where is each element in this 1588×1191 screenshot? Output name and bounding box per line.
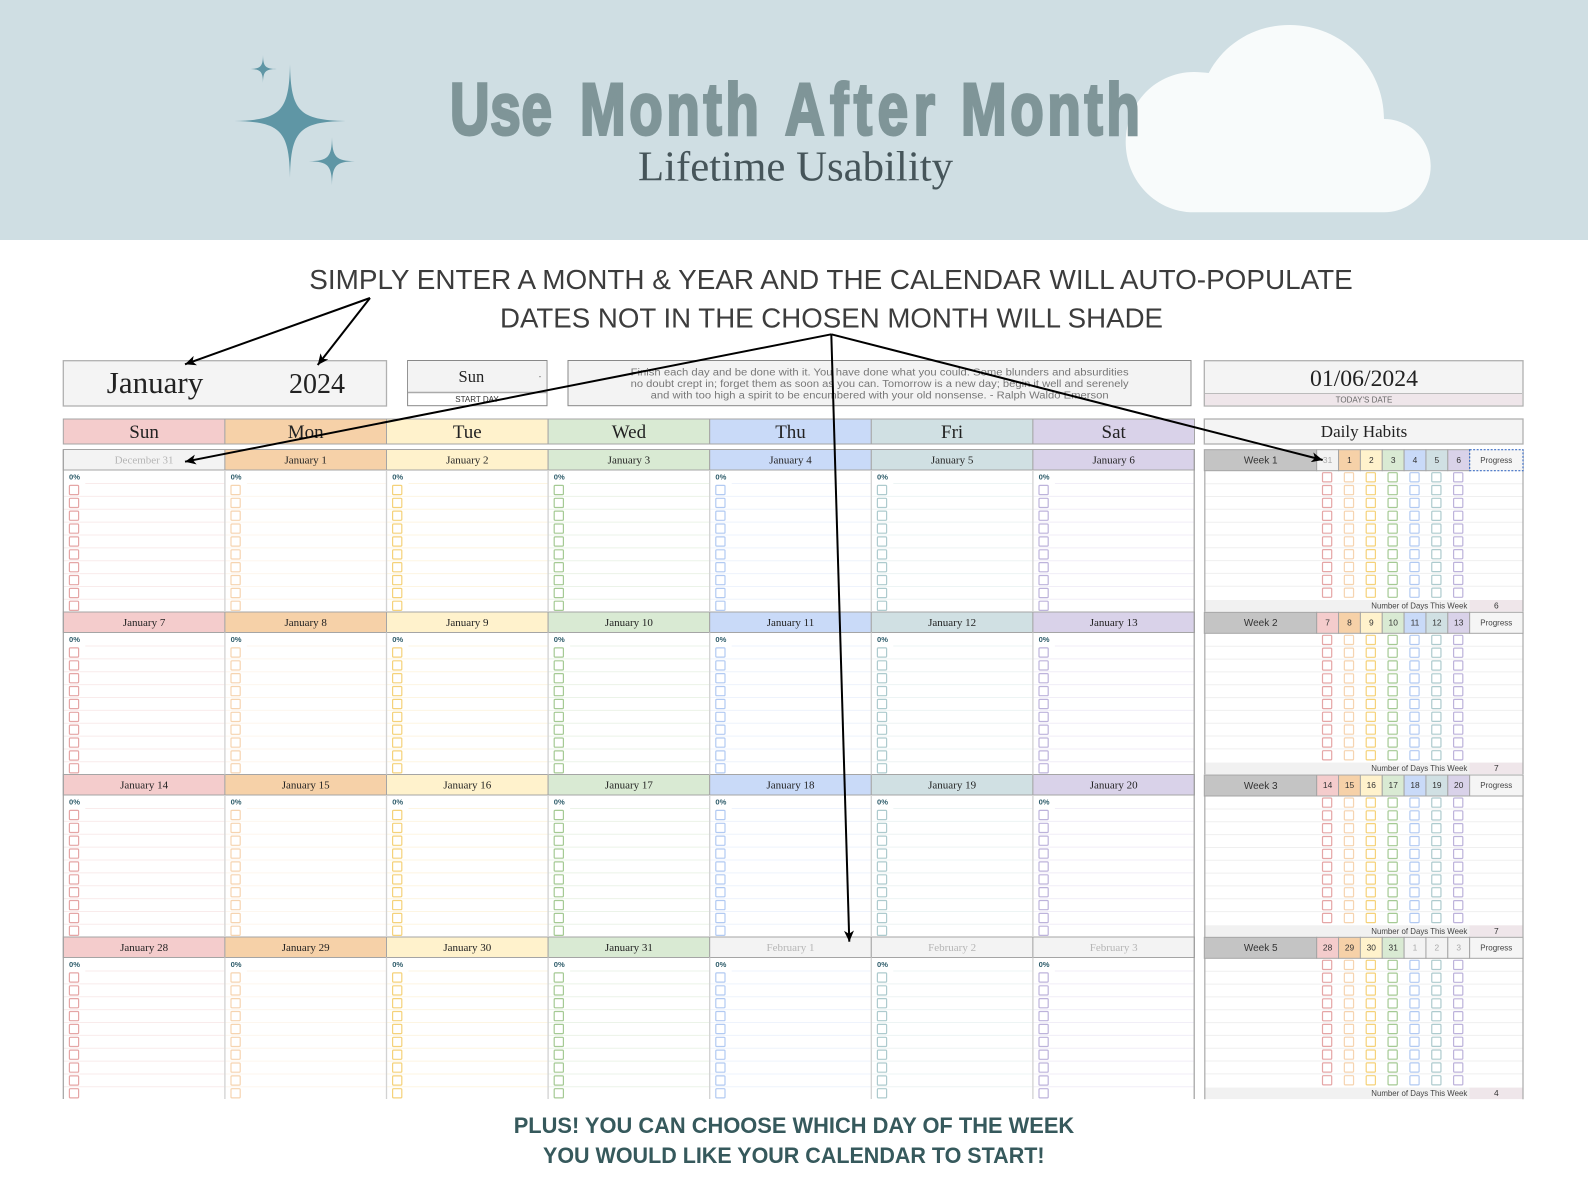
panel: habits week 1: 4 — [1413, 455, 1418, 465]
day: January 13 — [1033, 612, 1194, 773]
panel: today's date: TODAY'S DATE — [1336, 396, 1392, 405]
panel: habits week 2: 10 — [1389, 617, 1398, 627]
day: January 4: January 4 — [769, 454, 812, 466]
panel: quote — [568, 360, 1191, 406]
day: January 30: 0% — [392, 960, 403, 969]
panel: habits week 3 — [1204, 775, 1523, 937]
day: December 31: December 31 — [115, 454, 174, 466]
day: January 16: January 16 — [443, 780, 492, 792]
panel: habits week 3: 16 — [1367, 780, 1376, 790]
panel: start day selector: START DAY — [455, 395, 499, 404]
panel: habits week 3: 14 — [1323, 780, 1333, 790]
panel: start day selector: - — [539, 372, 542, 381]
panel: habits week 1 — [1204, 450, 1523, 612]
subtitle: Lifetime Usability — [638, 145, 953, 191]
day: January 14: 0% — [69, 798, 80, 807]
day: January 5: 0% — [877, 473, 888, 482]
day: January 31: 0% — [554, 960, 565, 969]
panel: habits week 5: 29 — [1345, 942, 1354, 952]
title: After — [785, 69, 941, 150]
panel: quote: and with too high a spirit to be encumbered with your old nonsense. - Ralph Waldo Emerson — [651, 390, 1109, 402]
instruction text: DATES NOT IN THE CHOSEN MONTH WILL SHADE — [500, 302, 1163, 333]
day: January 1 — [225, 450, 386, 610]
panel: habits week 5: 4 — [1494, 1088, 1499, 1098]
day: January 13: January 13 — [1090, 617, 1138, 629]
panel: today's date: 01/06/2024 — [1310, 366, 1418, 392]
panel: habits week 3: Week 3 — [1244, 781, 1278, 792]
callout: start day note: PLUS! YOU CAN CHOOSE WHICH DAY OF THE WEEK — [514, 1113, 1074, 1138]
weekday header row: Mon — [288, 422, 324, 443]
panel: daily habits heading — [1204, 419, 1523, 444]
title: Month — [961, 69, 1144, 150]
panel: habits week 5: 28 — [1323, 942, 1333, 952]
panel: month and year input — [63, 361, 387, 406]
day: February 3 — [1033, 937, 1194, 1098]
day: February 1 — [710, 937, 871, 1098]
panel: habits week 3: 15 — [1345, 780, 1354, 790]
panel: habits week 2: 13 — [1454, 617, 1464, 627]
day: January 16 — [386, 774, 548, 935]
panel: habits week 5: 3 — [1456, 942, 1461, 952]
arrows: shaded dates — [185, 334, 1323, 942]
day: January 17 — [548, 774, 710, 935]
panel: habits week 1: Progress — [1480, 456, 1512, 465]
day: January 10: 0% — [554, 635, 565, 644]
day: January 4: 0% — [715, 473, 727, 482]
panel: habits week 5: Progress — [1480, 943, 1512, 952]
day: January 15: January 15 — [282, 780, 330, 792]
day: January 7 — [63, 612, 225, 773]
day: January 6: January 6 — [1092, 454, 1135, 466]
day: January 17: 0% — [554, 798, 565, 807]
day: January 8: 0% — [231, 635, 242, 644]
day: January 28 — [63, 937, 225, 1098]
day: January 9 — [386, 612, 548, 773]
panel: month and year input: 2024 — [289, 369, 345, 400]
panel: habits week 5: 2 — [1435, 942, 1440, 952]
day: January 29: 0% — [231, 960, 242, 969]
day: January 11: January 11 — [767, 617, 814, 629]
weekday header row: Sun — [129, 422, 159, 443]
day: January 31 — [548, 937, 710, 1098]
day: January 29 — [225, 937, 386, 1098]
day: January 18: 0% — [715, 798, 727, 807]
day: January 1: January 1 — [284, 454, 327, 466]
day: January 18: January 18 — [767, 780, 815, 792]
day: January 28: January 28 — [120, 942, 169, 954]
panel: habits week 2: 7 — [1325, 617, 1330, 627]
panel: habits week 2: 7 — [1494, 763, 1499, 773]
day: January 10: January 10 — [605, 617, 653, 629]
panel: habits week 2: 12 — [1432, 617, 1442, 627]
day: February 1: 0% — [715, 960, 727, 969]
day: January 9: January 9 — [446, 617, 489, 629]
day: January 30: January 30 — [443, 942, 492, 954]
day: January 18 — [710, 774, 871, 935]
panel: habits week 1: 3 — [1391, 455, 1396, 465]
day: February 2 — [871, 937, 1033, 1098]
icon: cloud — [1126, 25, 1431, 212]
panel: habits week 1: 31 — [1323, 455, 1333, 465]
panel: habits week 2: 11 — [1411, 617, 1420, 627]
day: January 14: January 14 — [120, 780, 169, 792]
day: January 19 — [871, 774, 1033, 935]
day: January 3: 0% — [554, 473, 565, 482]
panel: habits week 1: Week 1 — [1244, 456, 1278, 467]
weekday header row: Fri — [941, 422, 963, 443]
day: February 3: 0% — [1039, 960, 1050, 969]
panel: habits week 3: 20 — [1454, 780, 1464, 790]
title: Use — [450, 69, 553, 150]
day: February 1: February 1 — [767, 942, 814, 954]
day: January 13: 0% — [1039, 635, 1050, 644]
day: January 2: January 2 — [446, 454, 489, 466]
panel: habits week 1: 5 — [1435, 455, 1440, 465]
weekday header row: Sat — [1102, 422, 1127, 443]
panel: quote: Finish each day and be done with it. You have done what you could. Some blunders and absurdities — [631, 368, 1129, 378]
day: December 31: 0% — [69, 473, 80, 482]
day: January 12: January 12 — [928, 617, 976, 629]
day: January 20: 0% — [1039, 798, 1050, 807]
day: January 3: January 3 — [608, 454, 651, 466]
calendar grid — [63, 450, 1194, 1098]
panel: habits week 5: 1 — [1413, 942, 1418, 952]
day: January 12: 0% — [877, 635, 888, 644]
icon: sparkles — [234, 55, 355, 185]
arrows: month and year — [185, 298, 370, 365]
day: January 7: 0% — [69, 635, 80, 644]
day: January 30 — [386, 937, 548, 1098]
day: January 16: 0% — [392, 798, 403, 807]
day: January 4 — [710, 450, 871, 610]
day: January 11: 0% — [715, 635, 727, 644]
day: January 9: 0% — [392, 635, 403, 644]
day: January 20 — [1033, 774, 1194, 935]
panel: habits week 5: Week 5 — [1244, 943, 1278, 954]
day: January 31: January 31 — [605, 942, 653, 954]
panel: habits week 5: 31 — [1389, 942, 1398, 952]
instruction text: SIMPLY ENTER A MONTH & YEAR AND THE CALENDAR WILL AUTO-POPULATE — [309, 264, 1353, 295]
day: January 6: 0% — [1039, 473, 1050, 482]
instruction text — [309, 264, 1353, 333]
weekday header row: Tue — [453, 422, 482, 443]
weekday header row: Thu — [775, 422, 806, 443]
panel: quote: no doubt crept in; forget them as soon as you can. Tomorrow is a new day; begin it well and serenely — [631, 379, 1129, 390]
day: January 5: January 5 — [931, 454, 974, 466]
day: January 5 — [871, 450, 1033, 610]
panel: habits week 2: Progress — [1480, 618, 1512, 627]
day: January 29: January 29 — [282, 942, 330, 954]
day: February 3: February 3 — [1090, 942, 1138, 954]
day: January 15 — [225, 774, 386, 935]
day: January 14 — [63, 774, 225, 935]
callout: start day note: YOU WOULD LIKE YOUR CALENDAR TO START! — [543, 1143, 1044, 1168]
day: January 17: January 17 — [605, 780, 653, 792]
day: January 8 — [225, 612, 386, 773]
day: January 19: January 19 — [928, 780, 977, 792]
panel: habits week 3: 19 — [1432, 780, 1442, 790]
panel: habits week 1: 6 — [1456, 455, 1461, 465]
day: January 2 — [386, 450, 548, 610]
day: December 31 — [63, 450, 225, 610]
day: January 6 — [1033, 450, 1194, 610]
day: January 2: 0% — [392, 473, 403, 482]
panel: today's date — [1204, 361, 1523, 406]
day: January 7: January 7 — [123, 617, 166, 629]
callout: start day note — [514, 1113, 1074, 1168]
day: January 3 — [548, 450, 710, 610]
day: February 2: February 2 — [928, 942, 976, 954]
panel: habits week 3: 7 — [1494, 926, 1499, 936]
panel: daily habits heading: Daily Habits — [1321, 422, 1407, 441]
day: February 2: 0% — [877, 960, 888, 969]
panel: habits week 2: Week 2 — [1244, 618, 1278, 629]
title — [450, 69, 1144, 150]
panel: habits week 3: 18 — [1410, 780, 1420, 790]
day: January 11 — [710, 612, 871, 773]
day: January 19: 0% — [877, 798, 888, 807]
panel: habits week 2: 9 — [1369, 617, 1374, 627]
day: January 28: 0% — [69, 960, 80, 969]
panel: habits week 1: 1 — [1347, 455, 1352, 465]
title: Month — [580, 69, 763, 150]
panel: habits week 2: 8 — [1347, 617, 1352, 627]
panel: habits week 5: 30 — [1367, 942, 1376, 952]
panel: month and year input: January — [107, 365, 204, 400]
day: January 1: 0% — [231, 473, 242, 482]
header band — [0, 0, 1588, 240]
day: January 15: 0% — [231, 798, 242, 807]
weekday header row: Wed — [612, 422, 647, 443]
panel: habits week 2 — [1204, 612, 1523, 774]
panel: habits week 3: 17 — [1389, 780, 1398, 790]
panel: habits week 1: 6 — [1494, 601, 1499, 611]
panel: start day selector — [408, 360, 547, 406]
panel: habits week 5 — [1204, 937, 1523, 1099]
panel: habits week 1: 2 — [1369, 455, 1374, 465]
panel: habits week 3: Progress — [1480, 781, 1512, 790]
day: January 20: January 20 — [1090, 780, 1138, 792]
weekday header row — [63, 419, 1194, 444]
day: January 12 — [871, 612, 1033, 773]
day: January 10 — [548, 612, 710, 773]
panel: start day selector: Sun — [459, 367, 484, 386]
day: January 8: January 8 — [284, 617, 327, 629]
